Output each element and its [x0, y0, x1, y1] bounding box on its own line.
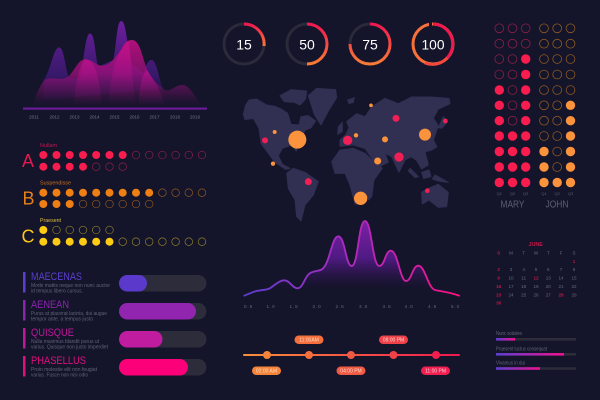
area chart with years: 2011 — [29, 114, 39, 120]
calendar: 17 — [508, 284, 514, 289]
wave line chart: 4.0 — [404, 304, 414, 309]
dot rating group C: C — [22, 226, 34, 246]
item: Maecenas: id tempus libero cursus. — [31, 289, 83, 295]
calendar: 28 — [558, 292, 564, 297]
calendar — [496, 242, 577, 306]
world map with bubbles — [243, 88, 450, 221]
area chart with years: 2015 — [109, 114, 120, 120]
calendar: 18 — [521, 284, 527, 289]
wave line chart: 2.5 — [335, 304, 345, 309]
dot grid: John — [539, 24, 575, 211]
time label 08:00 PM — [379, 336, 408, 344]
progress: Praesent luctus consequat — [496, 346, 576, 356]
map: land masses — [243, 88, 450, 221]
calendar: 22 — [571, 284, 577, 289]
calendar: M — [509, 250, 513, 256]
dot rating group A — [22, 143, 206, 171]
calendar: 3 — [510, 267, 513, 272]
calendar: W — [534, 250, 539, 256]
dot rating group B: B — [22, 189, 35, 209]
gauge 15: 15 — [236, 36, 252, 52]
wave line chart: 4.5 — [428, 304, 437, 309]
map: bubbles — [262, 103, 448, 205]
wave line chart: 5.0 — [451, 304, 460, 309]
time label 11:00AM — [294, 336, 324, 344]
calendar: 26 — [533, 292, 539, 297]
wave line chart: 3.0 — [359, 304, 368, 309]
area chart with years: 2014 — [89, 114, 100, 120]
time label 11:00 PM — [421, 366, 450, 375]
calendar: 25 — [521, 292, 527, 297]
wave line chart: 0.5 — [244, 304, 253, 309]
item: Aenean: Purus at placerat lacinia, dui augue — [31, 311, 107, 317]
calendar: 2 — [497, 267, 500, 272]
item: Phasellus: Proin molestie elit non feugiat — [31, 367, 98, 373]
calendar: 27 — [546, 292, 551, 297]
time label 02:00 AM: 02:00 AM — [256, 369, 277, 375]
gauge 50: 50 — [299, 36, 315, 52]
dot rating group B — [22, 180, 206, 209]
calendar: 4 — [522, 267, 525, 272]
timeline — [243, 336, 460, 375]
item: Quisque: QUISQUE — [31, 327, 74, 339]
time label 04:00 PM: 04:00 PM — [340, 369, 362, 375]
dot grid: John: Q2 — [555, 191, 561, 196]
progress: Nunc sodales: Nunc sodales — [496, 331, 522, 337]
calendar: 14 — [558, 276, 564, 280]
wave line chart: 1.0 — [266, 304, 276, 309]
item: Phasellus: PHASELLUS — [31, 355, 86, 367]
calendar: 21 — [558, 284, 564, 289]
calendar: 1 — [573, 259, 576, 264]
progress: Nunc sodales — [496, 331, 576, 341]
calendar: 8 — [573, 267, 576, 272]
item: Quisque: Nulla maximus blandit purus ut — [31, 339, 100, 345]
gauge 15 — [224, 24, 264, 64]
ring gauges — [224, 22, 453, 64]
dot grid: John: JOHN — [546, 200, 568, 210]
item: Phasellus — [23, 355, 206, 379]
item: Quisque — [23, 327, 206, 351]
dot grid: Mary — [495, 24, 530, 211]
time label 04:00 PM — [336, 366, 366, 375]
calendar: 6 — [547, 267, 550, 272]
area chart with years: 2018 — [170, 114, 181, 120]
item: Maecenas: Morbi mattis neque non nunc auctor — [31, 283, 110, 289]
area chart with years: 2019 — [190, 114, 201, 120]
calendar: 16 — [496, 284, 502, 289]
gauge 100 — [413, 22, 453, 64]
dot grid: John: Q1 — [541, 191, 547, 196]
progress: Vivamus in dui — [496, 360, 576, 370]
dot rating group A: A — [22, 151, 34, 171]
wave line chart: 3.5 — [382, 304, 392, 309]
calendar: 23 — [496, 292, 502, 297]
area chart with years: 2017 — [149, 114, 160, 120]
gauge 100: 100 — [422, 36, 445, 52]
calendar: 11 — [521, 276, 527, 280]
calendar: 15 — [571, 276, 577, 280]
dot grid: Mary: Q3 — [523, 191, 529, 196]
area chart with years: 2016 — [129, 114, 140, 120]
item: Quisque: varius. Quisque non justo imperdiet — [31, 345, 109, 351]
calendar: 12 — [533, 276, 539, 280]
dot rating group C: Praesent — [40, 218, 62, 224]
wave line chart — [244, 221, 460, 309]
item: Aenean: tempor ante, a tempus justo — [31, 317, 93, 323]
area chart with years — [23, 21, 207, 120]
calendar: T — [547, 250, 550, 256]
time label 02:00 AM — [252, 366, 281, 375]
calendar: 7 — [560, 267, 563, 272]
calendar: S — [497, 250, 500, 256]
time label 11:00 PM: 11:00 PM — [425, 369, 446, 375]
calendar: 13 — [546, 276, 551, 280]
calendar: S — [572, 250, 576, 256]
dot grid: Mary: Q1 — [497, 191, 503, 196]
dot rating group A: Nullam — [40, 143, 57, 149]
gauge 75: 75 — [362, 36, 378, 52]
dot grid: Mary: MARY — [500, 200, 525, 210]
gauge 75 — [350, 24, 390, 64]
time label 08:00 PM: 08:00 PM — [383, 338, 404, 344]
calendar: JUNE — [529, 242, 543, 248]
calendar: 5 — [535, 267, 538, 272]
item: Phasellus: varius. Fusce non nisi odio — [31, 373, 88, 379]
progress: Praesent luctus consequat: Praesent luctus consequat — [496, 346, 548, 352]
calendar: 20 — [546, 284, 551, 289]
calendar: T — [522, 250, 525, 256]
area chart with years: 2012 — [49, 114, 60, 120]
gauge 50 — [287, 24, 327, 64]
calendar: F — [560, 250, 563, 256]
item: Maecenas: MAECENAS — [31, 271, 82, 283]
calendar: 9 — [497, 276, 500, 280]
area chart with years: 2013 — [69, 114, 80, 120]
dot grid: Mary: Q2 — [510, 191, 516, 196]
dot rating group C — [22, 218, 206, 246]
calendar: 24 — [508, 292, 514, 297]
item: Maecenas — [23, 271, 206, 295]
progress: Vivamus in dui: Vivamus in dui — [496, 360, 525, 366]
calendar: 10 — [508, 276, 514, 280]
time label 11:00AM: 11:00AM — [299, 338, 319, 344]
dot rating group B: Suspendisse — [40, 180, 71, 186]
item: Aenean — [23, 299, 206, 323]
calendar: 19 — [533, 284, 539, 289]
calendar: 29 — [571, 292, 577, 297]
item: Aenean: AENEAN — [31, 299, 69, 311]
calendar: 30 — [496, 301, 502, 306]
dot grid: John: Q3 — [568, 191, 574, 196]
wave line chart: 1.5 — [289, 304, 299, 309]
wave line chart: 2.0 — [312, 304, 322, 309]
